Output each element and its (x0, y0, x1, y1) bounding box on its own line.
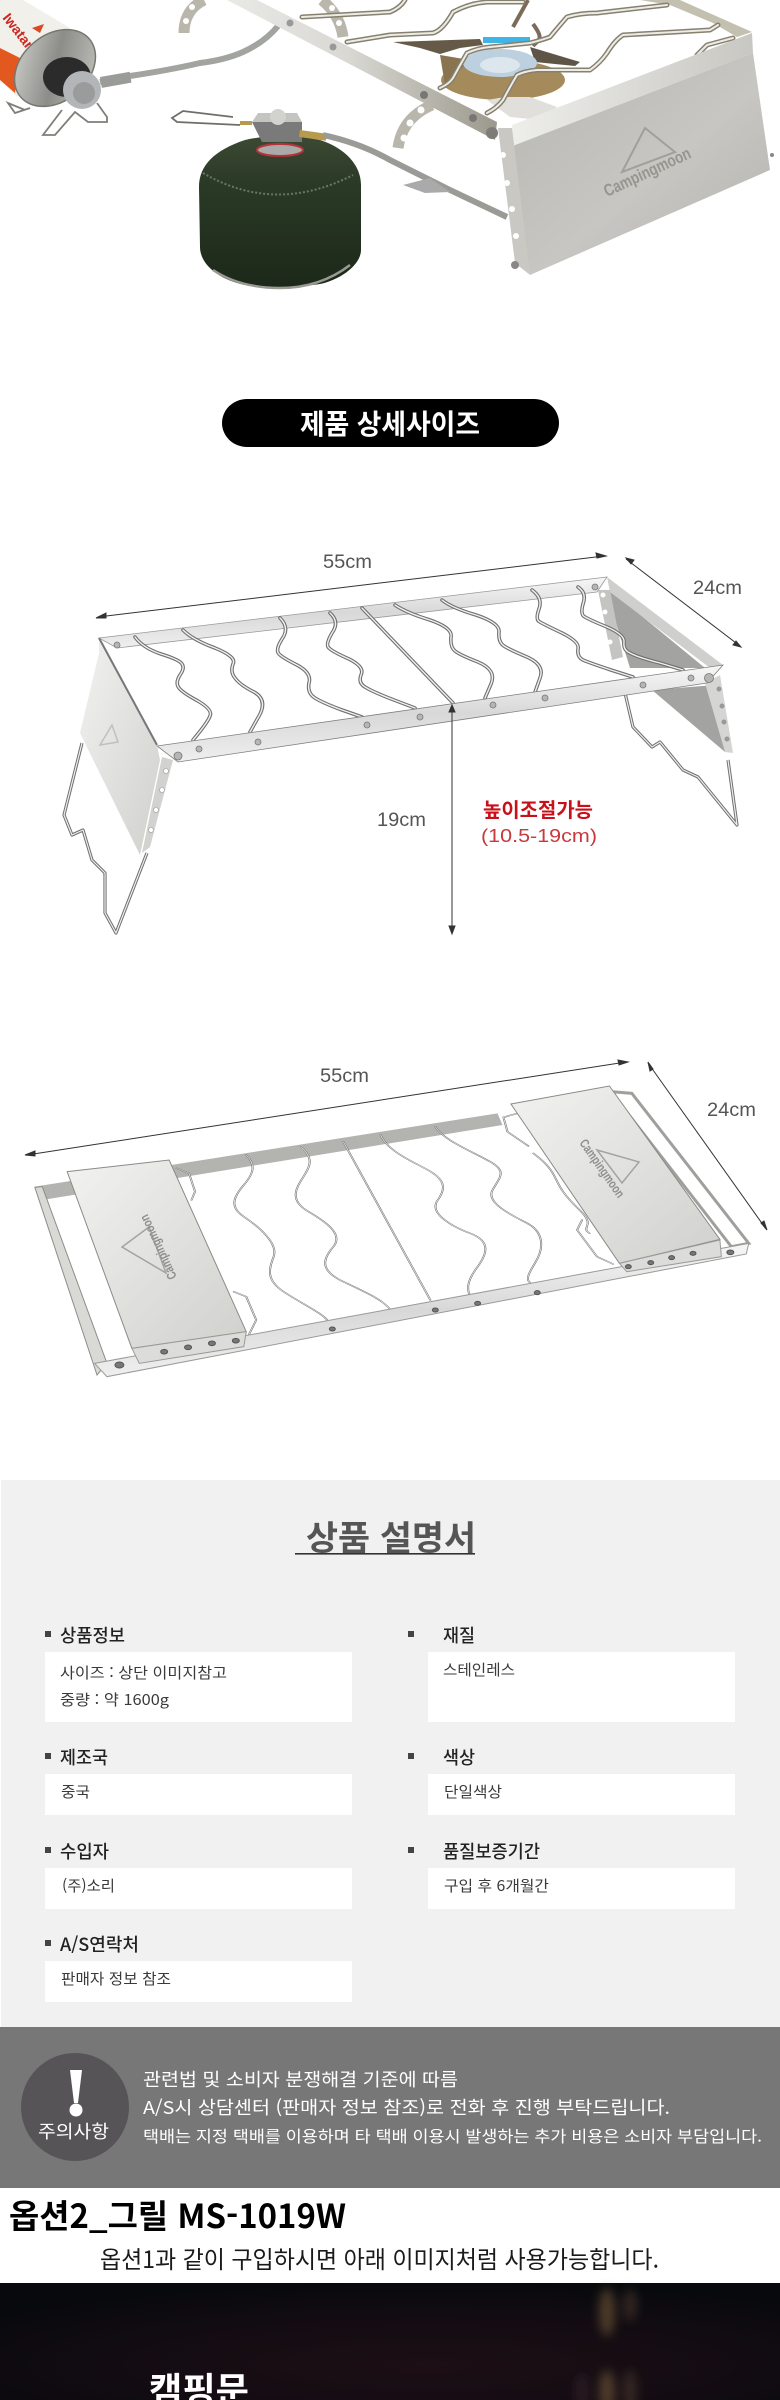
caution text: 관련법 및 소비자 분쟁해결 기준에 따름 (143, 2066, 458, 2092)
item: country of manufacture: 중국 (61, 1781, 90, 1802)
item: warranty period: 품질보증기간 (443, 1838, 540, 1864)
item: material: 스테인레스 (443, 1659, 515, 1680)
panel rivets (115, 1250, 734, 1368)
arc legs of the stand (184, 0, 432, 148)
item: colour: 단일색상 (444, 1781, 502, 1802)
arrow: width 55cm (96, 553, 606, 618)
item: importer: (주)소리 (62, 1875, 115, 1896)
right wire leg (625, 693, 737, 825)
icon: screw-on gas canister (0, 0, 131, 135)
outer frame (35, 1113, 502, 1200)
panel: cautions (0, 2027, 780, 2188)
item: importer (45, 1838, 352, 1909)
left wind panel (80, 638, 173, 855)
far rail of the stand (640, 0, 752, 37)
flexible gas hose (100, 26, 278, 82)
arrow: depth 24cm (626, 558, 741, 647)
logo on left panel: Campingmoon (137, 1212, 180, 1282)
item: product info (45, 1622, 352, 1722)
burner (393, 0, 580, 120)
item: A/S contact: A/S연락처 (60, 1931, 139, 1957)
wind screen panel (486, 33, 774, 275)
item: warranty period (408, 1838, 735, 1909)
left folded panel (67, 1160, 246, 1363)
arrow: height 19cm (449, 705, 455, 934)
support wires (177, 1113, 613, 1335)
right folded panel (511, 1086, 721, 1272)
label: 24cm: 24cm (693, 578, 742, 599)
front rail rivets (114, 584, 714, 760)
item: material (408, 1622, 735, 1722)
heading pill: product size (222, 399, 559, 447)
item: product info: 상품정보 (60, 1622, 125, 1648)
blurred lights (576, 2288, 637, 2400)
panel: product description (1, 1480, 780, 2027)
label: 24cm: 24cm (707, 1100, 756, 1121)
left wire leg (64, 743, 147, 933)
arrow: width 55cm (25, 1060, 628, 1156)
arc leg holes (183, 4, 424, 142)
diagram: folded grill with dimensions (25, 1060, 767, 1377)
callout: adjustable height: 높이조절가능 (483, 794, 593, 823)
front rail (157, 665, 723, 762)
logo on right panel: Campingmoon (577, 1136, 628, 1200)
heading: product description: 상품 설명서 (306, 1511, 476, 1560)
icon: caution badge (21, 2053, 129, 2161)
item: A/S contact (45, 1931, 352, 2002)
item: colour (408, 1744, 735, 1815)
caution text (143, 2066, 762, 2147)
caution text: 택배는 지정 택배를 이용하며 타 택배 이용시 발생하는 추가 비용은 소비자 부담입니다. (143, 2123, 762, 2147)
diagram: standing grill with dimensions (64, 552, 742, 934)
wind screen panel: Campingmoon (601, 144, 694, 201)
icon: caution badge: 주의사항 (38, 2118, 109, 2144)
item: warranty period: 구입 후 6개월간 (444, 1875, 549, 1896)
grill wires (302, 0, 733, 113)
support wires (135, 587, 683, 740)
label: 55cm: 55cm (323, 552, 372, 573)
arrow: depth 24cm (648, 1062, 767, 1230)
back rail (99, 577, 607, 648)
caution text: A/S시 상담센터 (판매자 정보 참조)로 전화 후 진행 부탁드립니다. (143, 2094, 670, 2120)
rail of the stand (227, 0, 497, 140)
item: material: 재질 (443, 1622, 475, 1648)
photo: dark camping scene (0, 2283, 780, 2400)
photo: stove with gas canisters (0, 0, 774, 288)
label: 55cm: 55cm (320, 1066, 369, 1087)
icon: green gas canister (172, 109, 361, 288)
folded grill frame (35, 1086, 749, 1377)
item: importer: 수입자 (60, 1838, 109, 1864)
icon: screw-on gas canister: Iwatani (0, 10, 41, 57)
callout: adjustable height: (10.5-19cm) (481, 826, 597, 846)
label: 19cm: 19cm (377, 810, 426, 831)
subheading: usage note: 옵션1과 같이 구입하시면 아래 이미지처럼 사용가능합니다. (100, 2240, 659, 2275)
item: A/S contact: 판매자 정보 참조 (61, 1968, 171, 1989)
item: product info: 중량 : 약 1600g (60, 1689, 170, 1710)
item: colour: 색상 (443, 1744, 475, 1770)
heading pill: product size: 제품 상세사이즈 (300, 403, 480, 443)
front rail (95, 1243, 749, 1377)
item: country of manufacture (45, 1744, 352, 1815)
callout: adjustable height (481, 794, 597, 846)
right wind panel (598, 577, 733, 753)
item: country of manufacture: 제조국 (60, 1744, 108, 1770)
item: product info: 사이즈 : 상단 이미지참고 (60, 1662, 227, 1683)
heading: option 2 grill: 옵션2_그릴 MS-1019W (9, 2190, 346, 2238)
icon: braided gas hose (323, 135, 507, 217)
